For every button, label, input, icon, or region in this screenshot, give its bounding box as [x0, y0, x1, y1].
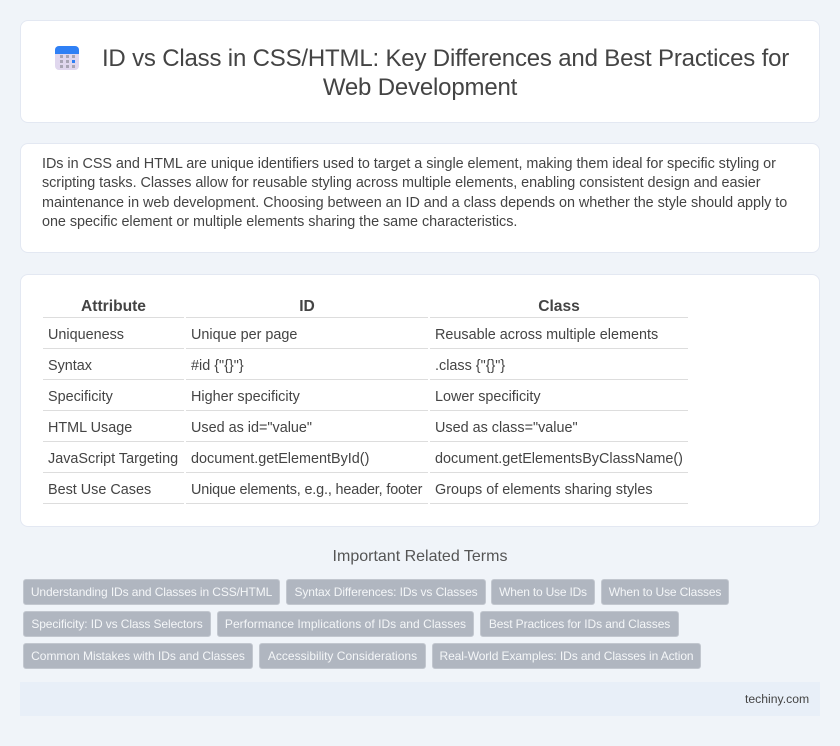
table header: Class: Class — [538, 298, 580, 315]
panel: header card — [20, 20, 820, 123]
text: Specificity — [48, 389, 113, 405]
tags: related terms: Performance Implications of IDs and Classes — [225, 617, 466, 631]
text: Lower specificity — [435, 389, 541, 405]
table header: ID — [186, 297, 428, 318]
text: HTML Usage — [48, 420, 132, 436]
row: JavaScript Targeting — [43, 451, 688, 473]
text: Higher specificity — [191, 389, 300, 405]
table header: Attribute: Attribute — [81, 298, 146, 315]
text block: intro: scripting tasks. Classes allow for reusable styling across multiple elements, enabling consistent design and easier — [42, 175, 760, 191]
tags: related terms: Syntax Differences: IDs vs Classes — [294, 585, 478, 599]
text: document.getElementById() — [191, 451, 369, 467]
tags: related terms: When to Use Classes — [609, 585, 721, 599]
tags: related terms: When to Use IDs — [499, 585, 587, 599]
text: Best Use Cases — [48, 482, 151, 498]
text: Syntax — [48, 358, 92, 374]
tags: related terms: Accessibility Considerations — [268, 649, 417, 663]
table header: Class — [430, 297, 688, 318]
text: Reusable across multiple elements — [435, 327, 658, 343]
text: Unique per page — [191, 327, 297, 343]
footer: techiny.com: techiny.com — [745, 692, 809, 706]
text: Used as id="value" — [191, 420, 312, 436]
tags: related terms: Specificity: ID vs Class Selectors — [31, 617, 203, 631]
title: ID vs Class in CSS/HTML: Key Differences and Best Practices for — [102, 45, 789, 72]
text: .class {"{}"} — [435, 358, 505, 374]
title: Web Development — [323, 74, 517, 101]
text block: intro — [42, 156, 787, 230]
text: Used as class="value" — [435, 420, 578, 436]
text: #id {"{}"} — [191, 358, 244, 374]
panel: intro card — [20, 143, 820, 253]
row: Specificity — [43, 389, 688, 411]
tags: related terms — [23, 579, 729, 669]
panel: footer — [20, 682, 820, 716]
text: Unique elements, e.g., header, footer — [191, 482, 422, 498]
tags: related terms: Best Practices for IDs and Classes — [489, 617, 670, 631]
icon: calendar — [55, 46, 79, 70]
text: document.getElementsByClassName() — [435, 451, 683, 467]
title — [102, 45, 789, 101]
row: Uniqueness — [43, 327, 688, 349]
heading: Important Related Terms: Important Related Terms — [333, 548, 507, 565]
text: JavaScript Targeting — [48, 451, 178, 467]
tags: related terms: Common Mistakes with IDs and Classes — [31, 649, 245, 663]
row: Best Use Cases — [43, 482, 688, 504]
text: Groups of elements sharing styles — [435, 482, 653, 498]
text block: intro: one specific element or multiple elements sharing the same characteristics. — [42, 214, 517, 230]
text block: intro: IDs in CSS and HTML are unique identifiers used to target a single element, making them ideal for specific styling or — [42, 156, 776, 172]
text block: intro: maintenance in web development. Choosing between an ID and a class depends on whether the style should apply to — [42, 194, 787, 210]
text: Uniqueness — [48, 327, 124, 343]
table header: Attribute — [43, 297, 184, 318]
panel: table card — [20, 274, 820, 527]
row: Syntax — [43, 358, 688, 380]
tags: related terms: Real-World Examples: IDs and Classes in Action — [440, 649, 693, 663]
table header: ID: ID — [299, 298, 315, 315]
tags: related terms: Understanding IDs and Classes in CSS/HTML — [31, 585, 272, 599]
row: HTML Usage — [43, 420, 688, 442]
